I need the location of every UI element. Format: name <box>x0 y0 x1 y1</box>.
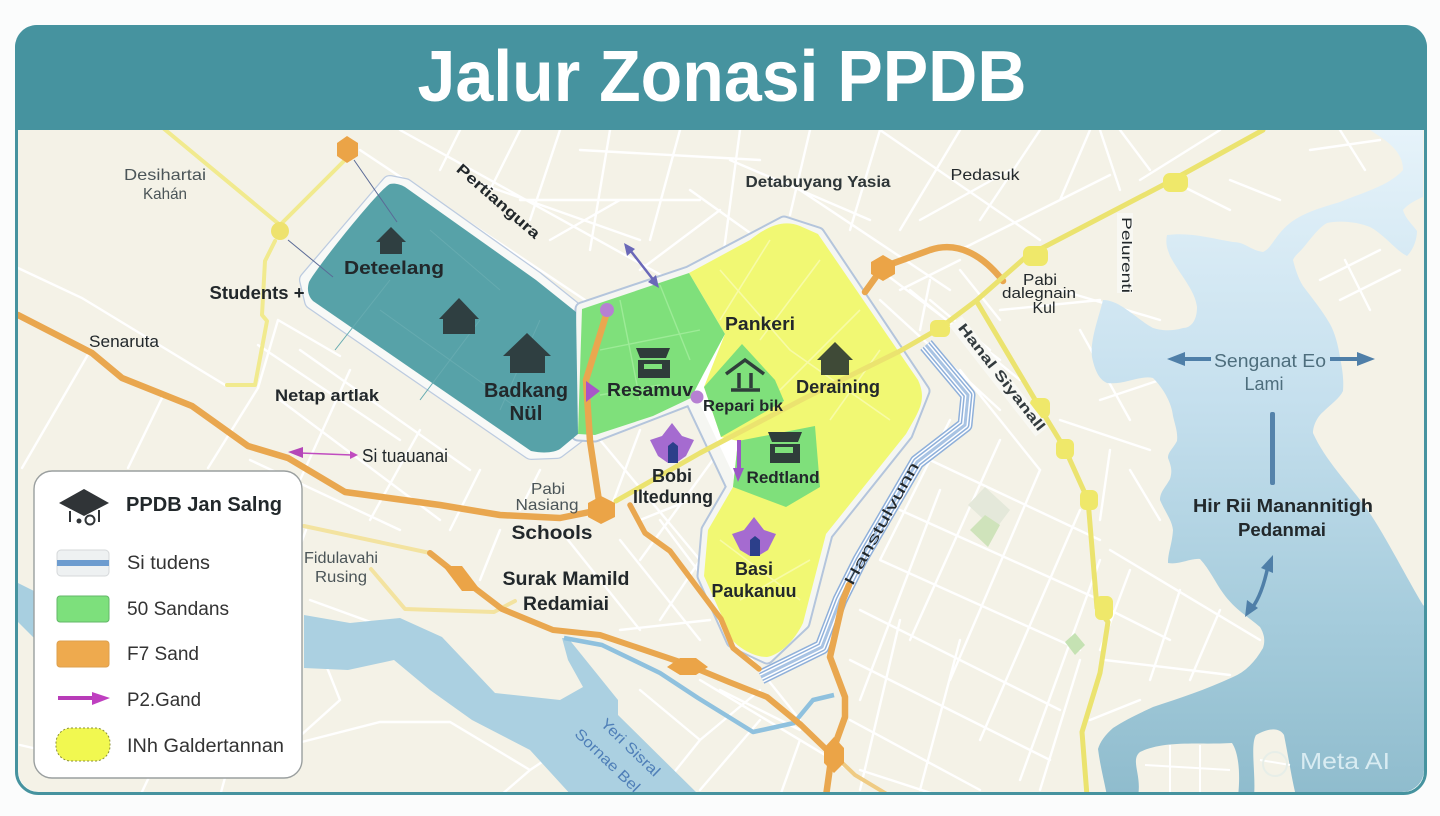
map labels: Pabi <box>531 481 565 498</box>
map labels: Nasiang <box>516 497 578 514</box>
water: eastern bay <box>1092 130 1430 796</box>
zone boundary: yellow and green outline <box>578 223 923 657</box>
map labels: Deteelang <box>344 258 444 278</box>
legend title: PPDB Jan Salng <box>126 494 282 516</box>
legend panel <box>34 471 302 778</box>
map labels: Repari bik <box>703 398 783 415</box>
map labels: Detabuyang Yasia <box>746 174 891 191</box>
orange roads <box>18 247 1003 796</box>
marker: vertical water bar <box>1270 412 1275 485</box>
map labels: Students + <box>210 283 304 303</box>
watermark ring <box>1263 752 1287 776</box>
map labels: Bobi <box>652 466 692 486</box>
map labels: Basi <box>735 559 773 579</box>
icon: open house <box>726 360 764 390</box>
icon: school building west <box>636 348 670 378</box>
arrow: water right <box>1330 352 1375 366</box>
icon: purple school north <box>650 423 694 463</box>
map labels: Lami <box>1244 374 1284 394</box>
icon: house small <box>376 227 406 254</box>
map labels: Netap artlak <box>275 386 380 405</box>
map labels: Schools <box>512 523 592 544</box>
zone: green centre <box>704 344 784 437</box>
map labels: Rusing <box>315 569 367 586</box>
map labels: Pertiangura <box>453 161 544 243</box>
strip behind rotated street labels <box>949 213 1133 436</box>
icon: graduation cap <box>59 489 109 524</box>
map labels: Deraining <box>796 377 880 397</box>
map labels: Pelurenti <box>1119 217 1135 293</box>
legend item: yellow zone <box>56 728 284 761</box>
legend item: yellow zone: INh Galdertannan <box>127 736 284 757</box>
legend item: magenta arrow <box>58 690 201 711</box>
arrow: magenta horizontal <box>288 447 358 459</box>
zone boundary: white ring <box>308 184 578 451</box>
legend item: green zone: 50 Sandans <box>127 599 229 620</box>
street grid <box>18 130 1400 796</box>
zone: yellow <box>689 223 922 657</box>
map labels: Pedasuk <box>950 167 1021 184</box>
pale yellow roads <box>163 128 515 612</box>
map labels: Redamiai <box>523 594 609 615</box>
legend item: orange road: F7 Sand <box>127 644 199 665</box>
map labels: Meta AI <box>1300 748 1390 774</box>
map labels <box>89 161 1390 796</box>
water: southern river <box>18 583 834 796</box>
zone: green south <box>733 426 820 507</box>
icon: house large <box>503 333 551 373</box>
legend item: magenta arrow: P2.Gand <box>127 690 201 711</box>
arrow: water double <box>1245 555 1273 617</box>
map labels: dalegnain <box>1002 285 1076 302</box>
map labels: Pedanmai <box>1238 520 1326 540</box>
blue canal lines <box>761 345 968 677</box>
zone: teal <box>308 184 578 452</box>
map labels: Hanstulvunn <box>841 459 923 588</box>
map labels: Iltedunng <box>633 487 713 507</box>
marker: purple nodes <box>600 303 704 404</box>
map labels: Badkang <box>484 380 568 402</box>
zone: green west <box>578 273 725 435</box>
legend item: orange road <box>57 641 199 667</box>
zone boundary: teal zone outline <box>308 184 578 451</box>
arrow: purple downward <box>733 440 744 482</box>
map labels: Kul <box>1032 300 1056 317</box>
arrow: blue-violet double <box>624 243 659 288</box>
map labels: Desihartai <box>124 167 206 184</box>
arrow: water left <box>1167 352 1211 366</box>
road junction nodes <box>271 136 1188 773</box>
map labels: Pankeri <box>725 314 795 334</box>
icon: purple school south <box>732 517 776 556</box>
icon: school building south <box>768 432 802 463</box>
map labels: Fidulavahi <box>304 550 378 567</box>
map labels: Hir Rii Manannitigh <box>1193 496 1373 516</box>
icon: house yellow zone <box>817 342 853 375</box>
map labels: Senaruta <box>89 332 160 351</box>
map labels: Resamuv <box>607 380 693 400</box>
title: Jalur Zonasi PPDB <box>418 37 1026 117</box>
header band <box>15 25 1427 130</box>
zone boundary: inner white ring <box>578 223 923 657</box>
map labels: Senganat Eo <box>1214 351 1326 371</box>
map labels: Pabi <box>1023 272 1057 289</box>
map labels: Surak Mamild <box>502 569 630 590</box>
map labels: Redtland <box>746 468 820 487</box>
map labels: Sornae Bel <box>571 725 643 796</box>
map labels: Kahán <box>143 186 187 203</box>
map labels: Yeri Sisral <box>597 715 663 780</box>
legend item: blue road <box>57 550 210 576</box>
map labels: Paukanuu <box>712 581 796 601</box>
map labels: Si tuauanai <box>362 446 448 466</box>
thin leader lines <box>288 160 397 277</box>
map labels: Hanal Siyanall <box>955 320 1049 434</box>
icon: house medium <box>439 298 479 334</box>
map labels: Nül <box>510 403 542 425</box>
legend item: green zone <box>57 596 229 622</box>
arrow: purple triangle <box>586 381 600 402</box>
park patches <box>968 487 1085 655</box>
yellow main roads <box>616 130 1263 796</box>
legend item: blue road: Si tudens <box>127 553 210 574</box>
